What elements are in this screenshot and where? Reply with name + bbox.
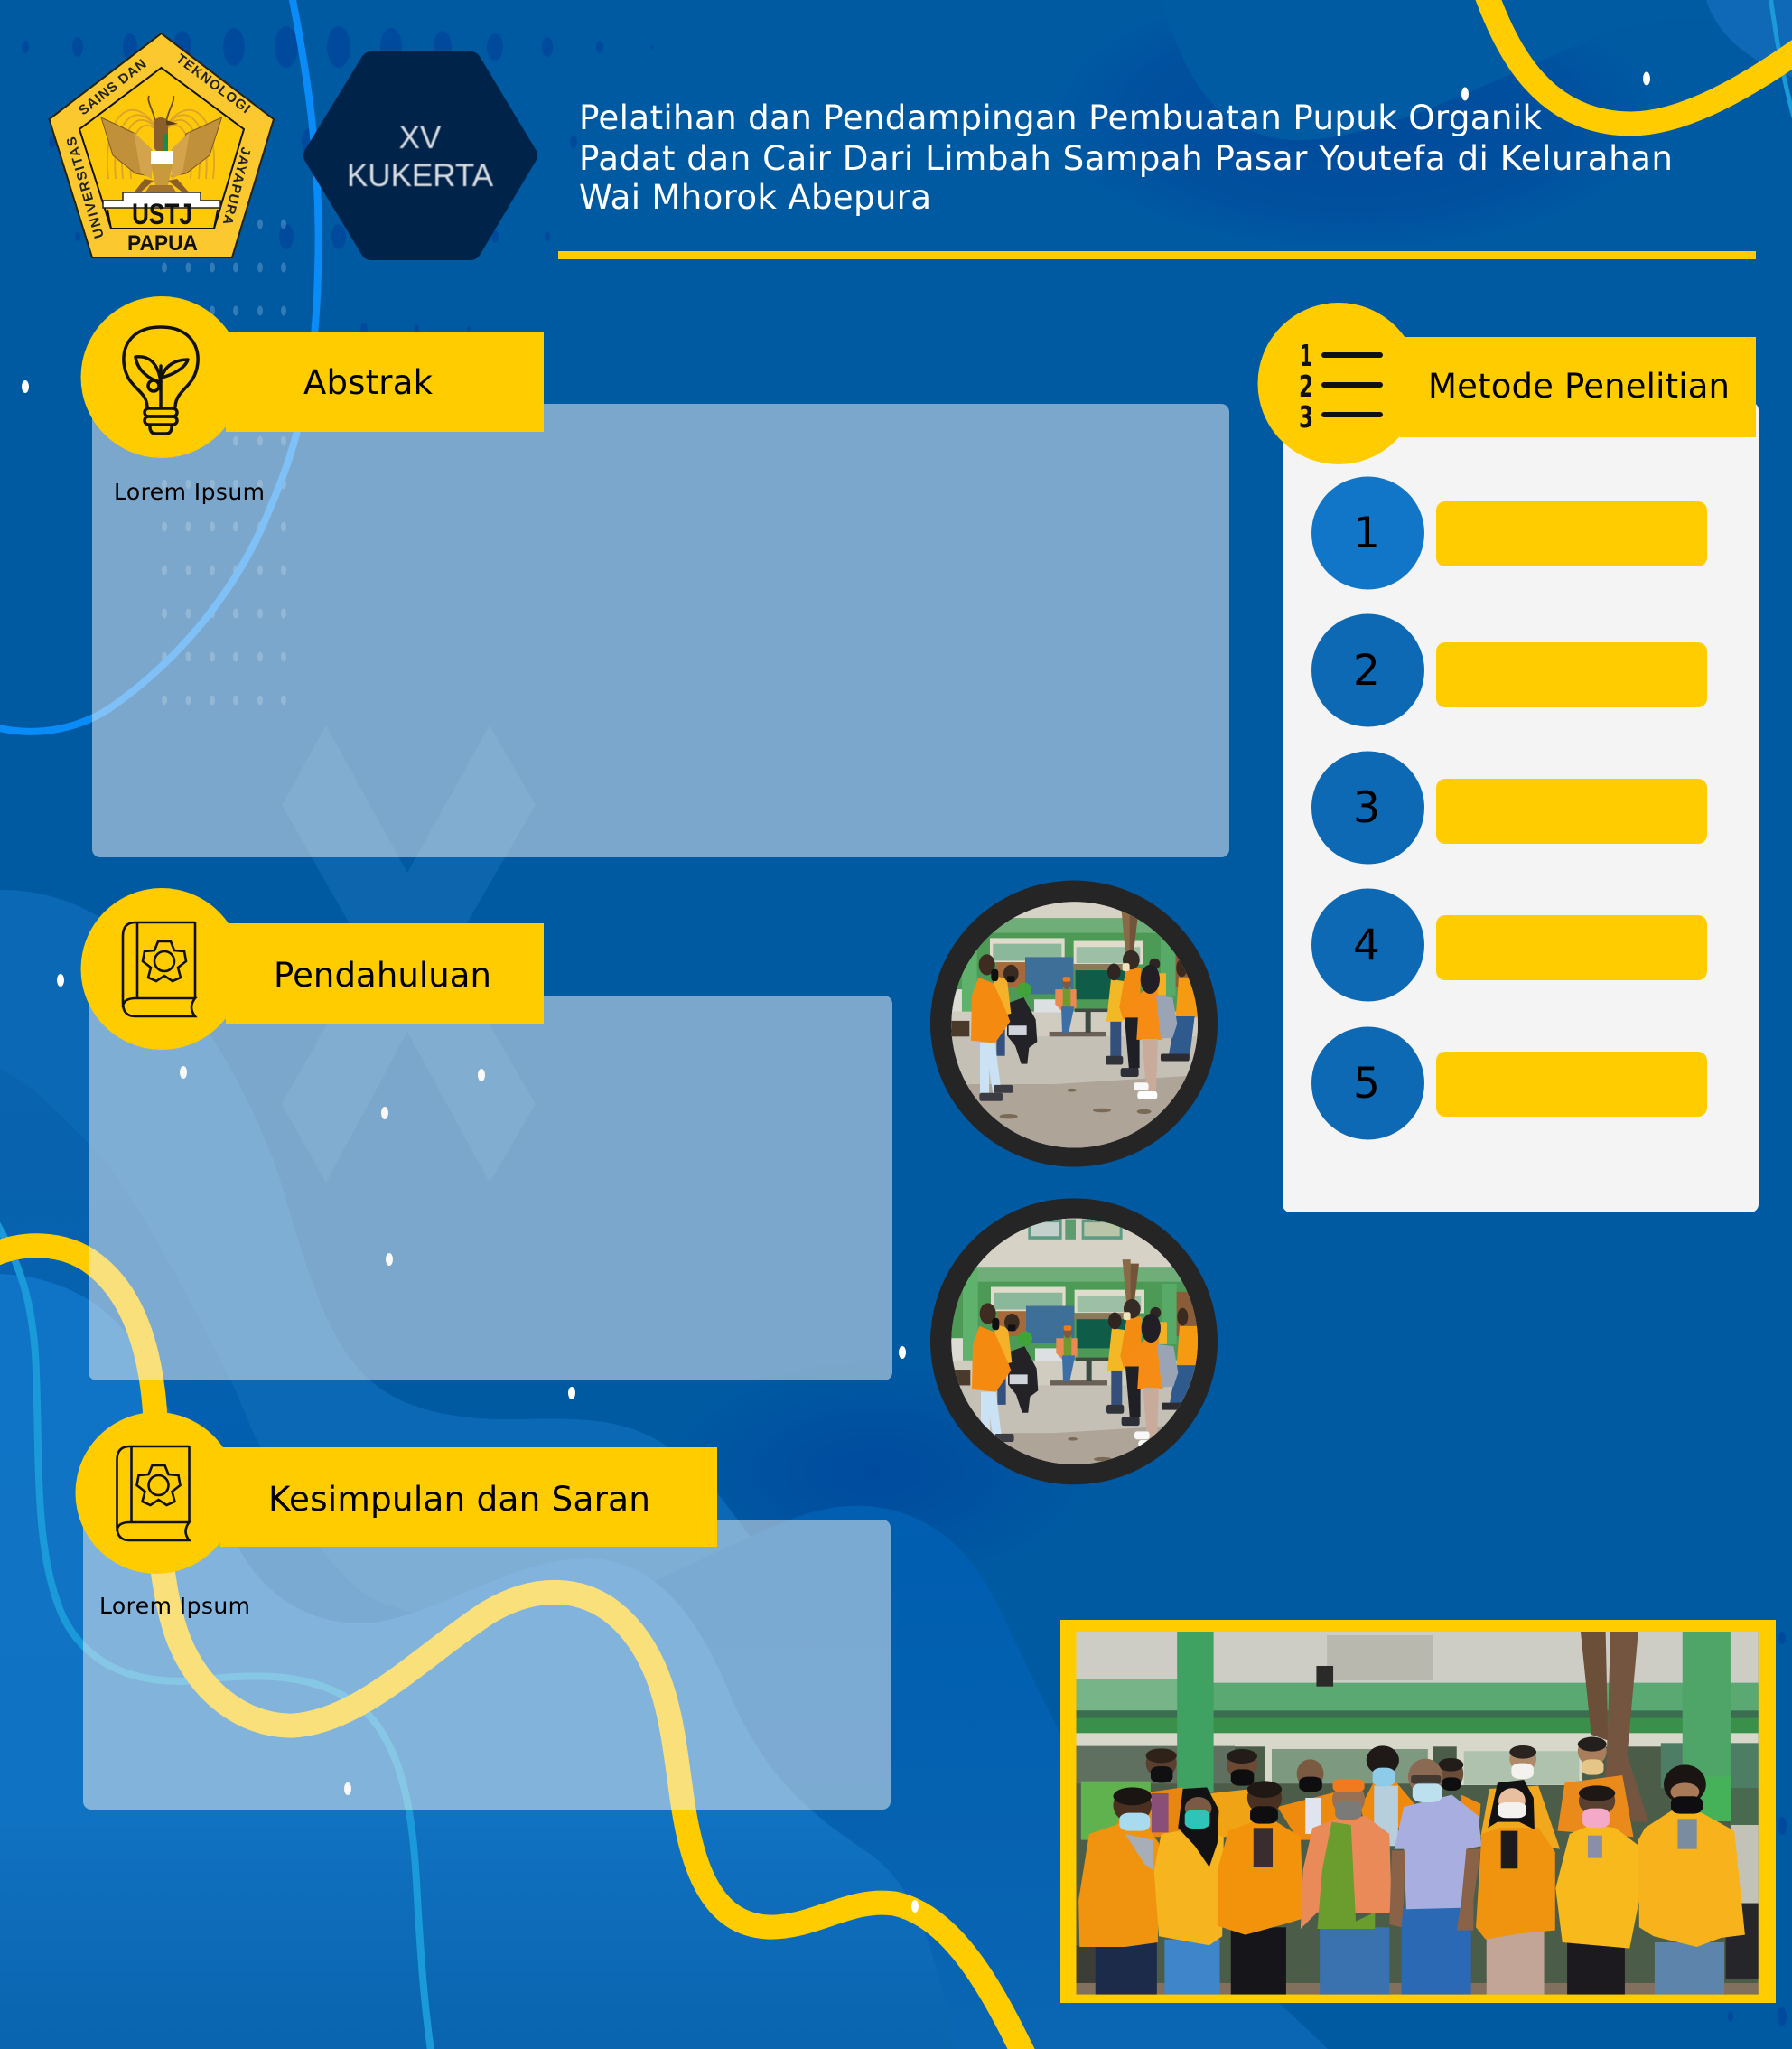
icon: book with gear — [117, 1446, 190, 1540]
step 5 — [1311, 1026, 1707, 1140]
icon: numbered list — [1299, 338, 1380, 435]
title — [579, 98, 1673, 217]
logo fan — [107, 96, 214, 179]
photo back row people — [1111, 1736, 1633, 1849]
heading: kesimpulan dan saran: Kesimpulan dan Saran — [268, 1479, 650, 1519]
yellow arc top right — [1486, 0, 1792, 124]
step 4 — [1311, 889, 1707, 1001]
title: Padat dan Cair Dari Limbah Sampah Pasar Youtefa di Kelurahan — [579, 138, 1673, 178]
logo text: USTJ — [132, 198, 192, 230]
step 4: 4 — [1353, 921, 1380, 970]
step 1 — [1311, 477, 1707, 589]
heading: kesimpulan dan saran — [76, 1412, 717, 1574]
step 2 — [1311, 614, 1707, 726]
round photo 1 — [930, 866, 1219, 1166]
heading: abstrak: Abstrak — [303, 363, 434, 402]
round photo 2 — [930, 1198, 1220, 1505]
university logo — [49, 33, 274, 257]
university logo: SAINS DAN — [76, 56, 149, 118]
kukerta hexagon badge: KUKERTA — [347, 158, 494, 193]
blue curve top left — [0, 0, 319, 732]
photo front row people — [1078, 1759, 1745, 1995]
title underline — [558, 251, 1756, 259]
team photo — [1060, 1620, 1776, 2003]
title: Pelatihan dan Pendampingan Pembuatan Pupuk Organik — [579, 98, 1542, 137]
decorative X diamonds — [282, 725, 536, 1183]
step 1: 1 — [1353, 509, 1380, 558]
kukerta hexagon badge: XV — [399, 120, 442, 155]
step 5: 5 — [1353, 1059, 1380, 1109]
panel: kesimpulan dan saran — [83, 1520, 891, 1810]
panel: metode penelitian — [1257, 303, 1759, 1212]
photo building — [1076, 1632, 1759, 1995]
logo bird — [101, 117, 222, 195]
text: lorem ipsum abstrak: Lorem Ipsum — [114, 479, 265, 505]
icon: book with gear — [123, 922, 195, 1016]
icon: light bulb with leaves — [124, 327, 198, 434]
light dot grid — [162, 219, 286, 705]
cyan curve top right — [1770, 0, 1792, 117]
step 3: 3 — [1353, 783, 1380, 833]
step 3 — [1311, 752, 1707, 864]
icon: numbered list: 1 — [1301, 338, 1311, 373]
yellow wave bottom — [0, 1246, 1024, 2049]
kukerta hexagon badge — [314, 62, 527, 249]
university logo: PAPUA — [127, 231, 198, 256]
panel: pendahuluan — [89, 996, 892, 1380]
university logo: TEKNOLOGI — [173, 51, 253, 117]
panel: abstrak — [92, 404, 1229, 857]
university logo: JAYAPURA — [219, 145, 254, 227]
university logo: UNIVERSITAS — [64, 135, 107, 240]
text: lorem ipsum kesimpulan: Lorem Ipsum — [99, 1593, 250, 1619]
heading: pendahuluan — [81, 888, 544, 1050]
heading: metode penelitian — [1257, 303, 1756, 464]
icon: numbered list: 3 — [1299, 399, 1313, 435]
heading: abstrak — [81, 296, 544, 458]
heading: metode penelitian: Metode Penelitian — [1428, 367, 1730, 406]
icon: numbered list: 2 — [1299, 369, 1313, 404]
step 2: 2 — [1353, 646, 1380, 696]
cyan curve bottom left — [0, 1221, 431, 2049]
heading: pendahuluan: Pendahuluan — [274, 956, 491, 995]
logo pedestal — [103, 192, 220, 208]
title: Wai Mhorok Abepura — [579, 177, 931, 217]
